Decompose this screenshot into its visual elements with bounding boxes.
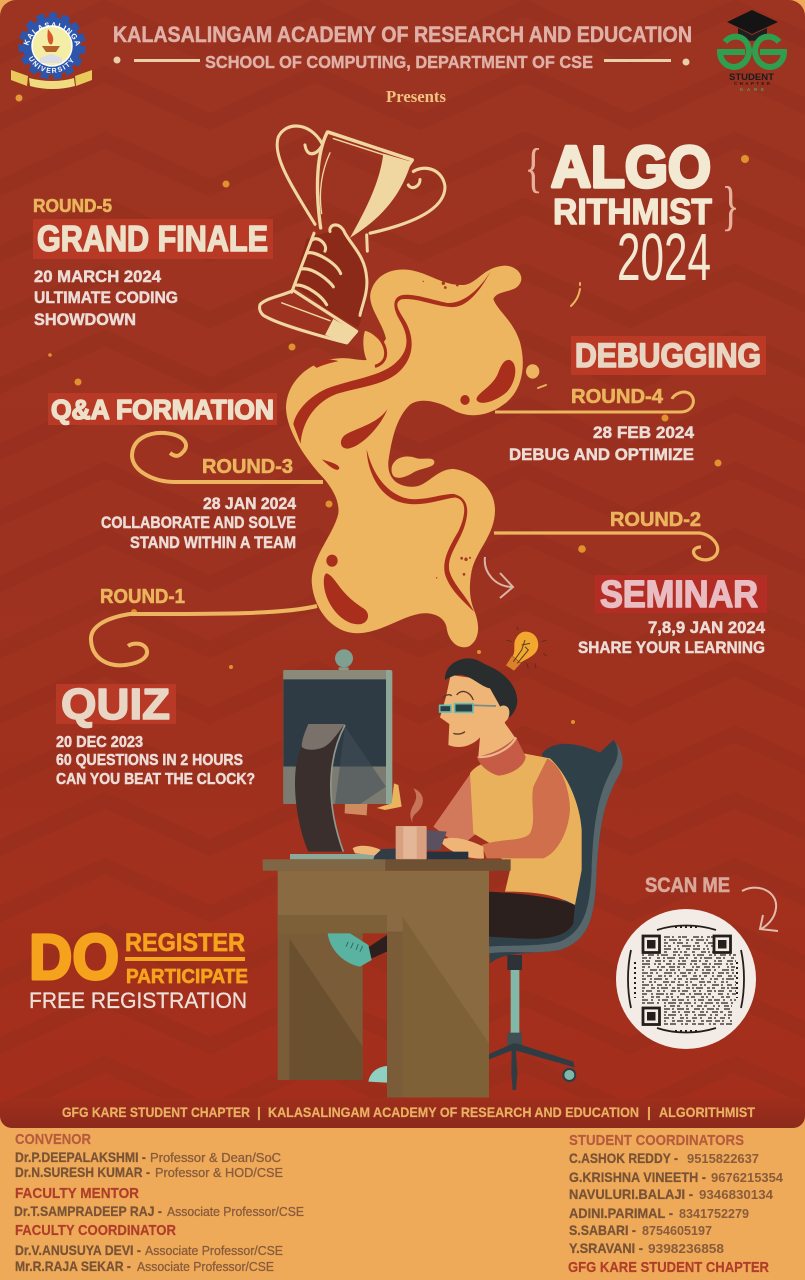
illustration: developer at desk [263,627,623,1097]
panel: round 4 debugging: ROUND-4 [571,386,664,408]
far arm [433,773,477,847]
panel: round 5 grand finale: ROUND-5 [33,196,112,216]
panel: round 4 debugging: DEBUG AND OPTIMIZE [509,445,694,464]
footer strip text: GFG KARE STUDENT CHAPTER [62,1104,250,1120]
panel: round 1 quiz [56,586,317,788]
logo: university crest: UNIVERSITY [29,56,74,74]
trophy base [260,290,357,344]
call to action: do register participate: FREE REGISTRATION [29,988,247,1013]
panel: faculty credits: Associate Professor/CSE [167,1205,304,1219]
footer strip text: ALGORITHMIST [659,1104,755,1120]
panel: faculty credits: Mr.R.RAJA SEKAR - [15,1258,131,1274]
panel: faculty credits: Associate Professor/CSE [137,1260,274,1274]
panel: faculty credits: Professor & Dean/SoC [150,1151,281,1165]
panel: student coordinators: 8754605197 [642,1224,712,1238]
footer strip text: KALASALINGAM ACADEMY OF RESEARCH AND EDUCATION [268,1104,639,1120]
panel: round 3 q&a formation: ROUND-3 [202,456,293,478]
panel: student coordinators: GFG KARE STUDENT CHAPTER [568,1259,769,1276]
panel: round 3 q&a formation: STAND WITHIN A TEAM [130,533,296,552]
cup body [317,132,412,238]
panel: round 3 q&a formation [48,393,323,552]
panel: student coordinators: STUDENT COORDINATORS [569,1132,744,1149]
gripping hand [292,225,367,328]
panel: round 3 q&a formation: COLLABORATE AND SOLVE [101,513,296,532]
panel: round 2 seminar: 7,8,9 JAN 2024 [648,618,766,637]
panel: faculty credits: Dr.P.DEEPALAKSHMI - [15,1149,146,1165]
panel: faculty credits: Dr.T.SAMPRADEEP RAJ - [14,1203,162,1219]
logo: student chapter [720,10,784,92]
sweater [470,753,582,905]
office chair [489,740,623,1090]
desk [263,859,511,1097]
panel: faculty credits: CONVENOR [15,1131,91,1148]
panel: student coordinators: 9346830134 [699,1188,773,1202]
scan me label and arrow [645,874,778,931]
glasses [440,704,496,712]
logo: university crest [11,12,92,89]
coffee cup [396,788,427,859]
footer strip text: | [257,1104,261,1120]
trophy held in a hand [260,126,445,344]
panel: faculty credits: FACULTY COORDINATOR [15,1222,176,1239]
logo: student chapter: KARE [740,87,764,92]
near hand [439,838,484,859]
sub heading: department: SCHOOL OF COMPUTING, DEPARTMENT OF CSE [205,52,593,72]
far hand [353,846,381,855]
panel: student coordinators: G.KRISHNA VINEETH - [569,1169,706,1185]
neck fold [478,737,516,757]
turtleneck [477,738,526,776]
panel: round 1 quiz: 60 QUESTIONS IN 2 HOURS [56,752,243,769]
title: algorithmist 2024: RITHMIST [553,191,712,232]
monitor [283,649,402,859]
panel: round 5 grand finale: ULTIMATE CODING [34,288,178,307]
panel: student coordinators: Y.SRAVANI - [569,1240,643,1256]
panel: round 1 quiz: QUIZ [61,680,170,729]
panel: round 1 quiz: ROUND-1 [100,586,185,608]
panel: student coordinators: 9676215354 [711,1171,783,1185]
panel: student coordinators: NAVULURI.BALAJI - [569,1186,693,1202]
hair [445,658,517,719]
panel: round 2 seminar: SEMINAR [600,574,758,616]
panel: round 2 seminar: ROUND-2 [610,509,701,531]
panel: round 1 quiz: CAN YOU BEAT THE CLOCK? [56,771,255,788]
panel: round 3 q&a formation: 28 JAN 2024 [203,494,297,513]
trophy handles [277,126,445,251]
footer strip text [62,1104,755,1120]
sparkle accents [538,283,580,388]
title: algorithmist 2024 [525,135,739,295]
panel: student coordinators [568,1132,783,1276]
panel: round 5 grand finale: SHOWDOWN [34,310,136,329]
light bulb icon [506,627,547,671]
decorative orange dot [16,94,22,102]
near sleeve [482,758,570,858]
arrow: splash to seminar [485,557,513,598]
ear [498,706,509,723]
title: algorithmist 2024: 2024 [617,220,711,295]
heading: institute name: KALASALINGAM ACADEMY OF RESEARCH AND EDUCATION [113,22,692,47]
panel: round 4 debugging: DEBUGGING [575,337,761,375]
panel: faculty credits [14,1131,304,1274]
panel: round 5 grand finale [33,196,273,329]
other shoe [368,1066,387,1083]
hanging shoe [328,933,387,967]
far sleeve and hand [427,830,447,850]
panel: round 1 quiz: 20 DEC 2023 [56,734,143,751]
title: algorithmist 2024: } [722,176,739,236]
panel: student coordinators: S.SABARI - [569,1222,636,1238]
panel: round 4 debugging: 28 FEB 2024 [593,423,695,442]
panel: round 2 seminar [494,509,767,657]
title: algorithmist 2024: ALGO [551,135,711,200]
presents label: Presents [386,87,446,106]
footer strip text: | [647,1104,651,1120]
panel: round 2 seminar: SHARE YOUR LEARNING [578,638,765,657]
panel: round 5 grand finale: GRAND FINALE [37,218,268,259]
logo: student chapter: STUDENT [729,72,774,83]
far arm sleeve [373,848,400,859]
smile and brow [443,691,473,734]
panel: round 4 debugging [495,336,766,464]
title: algorithmist 2024: { [525,138,542,198]
scattered dots [48,155,749,724]
panel: faculty credits: FACULTY MENTOR [15,1185,139,1202]
liquid splash connecting rounds [286,266,539,647]
panel: student coordinators: ADINI.PARIMAL - [569,1205,673,1221]
panel: student coordinators: 9398236858 [648,1242,724,1256]
logo: student chapter: CHAPTER [734,81,771,86]
call to action: do register participate: DO [29,921,119,993]
panel: round 3 q&a formation: Q&A FORMATION [51,394,274,425]
qr code [616,909,756,1049]
scan me label and arrow: SCAN ME [645,874,730,897]
panel: round 5 grand finale: 20 MARCH 2024 [34,267,162,286]
panel: student coordinators: C.ASHOK REDDY - [569,1150,678,1166]
panel: student coordinators: 8341752279 [679,1207,749,1221]
panel: faculty credits: Dr.V.ANUSUYA DEVI - [15,1242,141,1258]
trousers [489,892,575,939]
call to action: do register participate [29,921,248,1013]
panel: faculty credits: Dr.N.SURESH KUMAR - [15,1164,150,1180]
panel: student coordinators: 9515822637 [687,1152,759,1166]
head and neck [440,675,515,756]
keyboard [425,852,468,859]
panel: faculty credits: Associate Professor/CSE [145,1244,283,1258]
call to action: do register participate: PARTICIPATE [126,966,248,988]
panel: faculty credits: Professor & HOD/CSE [155,1166,283,1180]
call to action: do register participate: REGISTER [125,929,245,957]
